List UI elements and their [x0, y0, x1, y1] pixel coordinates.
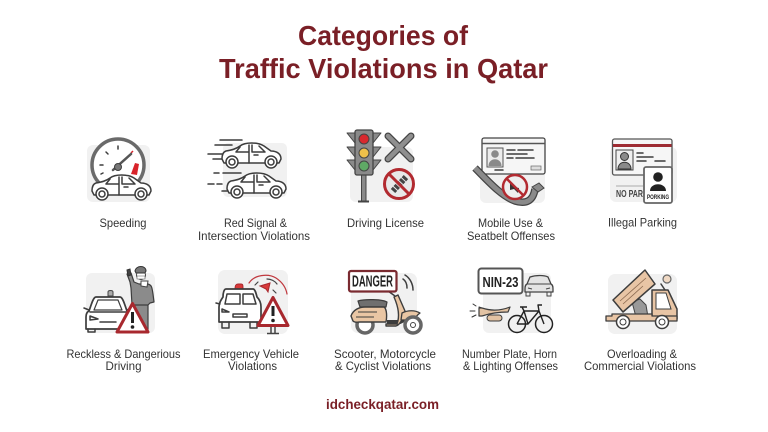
panel: illegal parking	[608, 139, 677, 230]
panel: emergency vehicle	[203, 270, 299, 373]
label: reckless driving	[66, 347, 180, 373]
panel: scooter	[334, 271, 436, 373]
label: driving license: Driving License	[347, 216, 424, 230]
label: mobile use and seatbelt: Seatbelt Offenses	[467, 229, 555, 243]
label: mobile use and seatbelt	[467, 216, 555, 243]
icon: card with no-parking sign: PORKING	[647, 195, 669, 201]
icon: emergency car and warning triangle	[216, 270, 288, 334]
label: mobile use and seatbelt: Mobile Use &	[478, 216, 543, 230]
icon: two speeding cars	[208, 140, 287, 198]
icon: tipping truck	[606, 270, 677, 334]
icon: card with no-parking sign	[610, 139, 677, 203]
label: speeding: Speeding	[100, 216, 146, 230]
icon: plate, car, horn and bicycle: NIN-23	[482, 274, 518, 291]
panel: driving license	[347, 130, 424, 230]
icon: police officer, car and warning	[84, 266, 155, 333]
icon: card with no-parking sign: NO PAR	[616, 189, 644, 200]
panel: mobile use and seatbelt	[467, 138, 555, 243]
footer website: idcheckqatar.com	[326, 396, 439, 412]
label: reckless driving: Reckless & Dangerious	[66, 347, 180, 361]
icon: speedometer and car	[87, 139, 151, 202]
title: Categories of	[298, 20, 469, 51]
label: illegal parking: Illegal Parking	[608, 216, 677, 230]
icon: id card, seatbelt and no-phone sign	[475, 138, 545, 203]
label: emergency vehicle: Emergency Vehicle	[203, 347, 299, 361]
label: overloading: Overloading &	[607, 347, 677, 361]
label: reckless driving: Driving	[106, 359, 142, 373]
panel: speeding	[87, 139, 151, 230]
icon: danger sign and scooter: DANGER	[352, 274, 393, 290]
panel: number plate	[462, 268, 558, 373]
label: red signal: Red Signal &	[224, 216, 287, 230]
label: scooter: & Cyclist Violations	[335, 359, 431, 373]
label: emergency vehicle	[203, 347, 299, 373]
icon: traffic light and signs	[347, 130, 414, 202]
title: Traffic Violations in Qatar	[219, 53, 548, 84]
panel: red signal	[198, 140, 310, 243]
panel: overloading	[584, 270, 696, 373]
label: scooter: Scooter, Motorcycle	[334, 347, 436, 361]
label: scooter	[334, 347, 436, 373]
title	[219, 20, 548, 84]
label: number plate	[462, 347, 558, 373]
label: emergency vehicle: Violations	[228, 359, 277, 373]
label: overloading: Commercial Violations	[584, 359, 696, 373]
panel: reckless driving	[66, 266, 180, 373]
label: red signal: Intersection Violations	[198, 229, 310, 243]
label: overloading	[584, 347, 696, 373]
label: red signal	[198, 216, 310, 243]
label: number plate: & Lighting Offenses	[463, 359, 558, 373]
label: number plate: Number Plate, Horn	[462, 347, 557, 361]
